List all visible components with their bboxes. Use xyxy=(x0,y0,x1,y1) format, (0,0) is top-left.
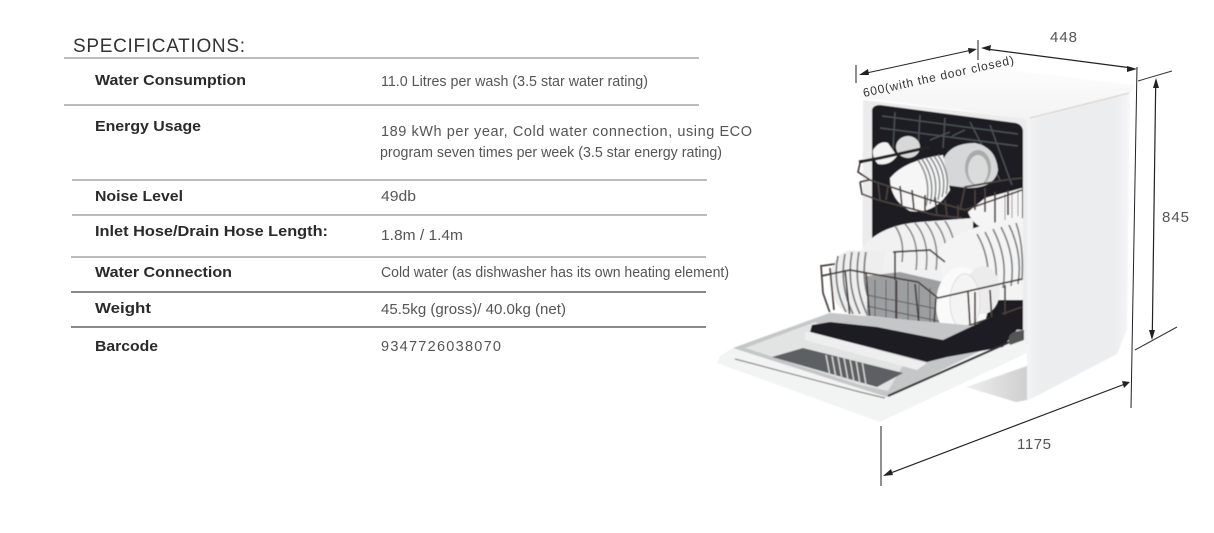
row: barcode: Barcode xyxy=(95,338,158,355)
row: energy usage: Energy Usage xyxy=(95,118,201,135)
door outer panel xyxy=(717,312,1027,422)
silver rack in door xyxy=(826,355,866,385)
open door xyxy=(717,312,1027,422)
upper rack wires xyxy=(858,147,1022,225)
row: noise level: Noise Level xyxy=(95,188,183,205)
dark interior xyxy=(865,105,1023,335)
cutlery basket xyxy=(867,272,943,338)
cabinet front frame xyxy=(862,100,1027,345)
row: noise level: 49db xyxy=(381,189,416,205)
row: hose length: 1.8m / 1.4m xyxy=(381,228,463,244)
front-left plates xyxy=(829,250,885,315)
mug xyxy=(943,143,998,188)
row: energy usage: 189 kWh per year, Cold water connection, using ECO xyxy=(381,124,752,140)
interior back-wall clutter xyxy=(880,112,1018,185)
dimension: 448 depth: 448 xyxy=(1050,29,1077,46)
row: water consumption: 11.0 Litres per wash (3.5 star water rating) xyxy=(381,74,648,90)
row: energy usage xyxy=(95,118,752,161)
row: energy usage: program seven times per week (3.5 star energy rating) xyxy=(380,145,722,161)
back plates xyxy=(862,218,973,290)
plinth xyxy=(966,366,1027,402)
row: water connection: Cold water (as dishwasher has its own heating element) xyxy=(381,265,729,281)
row: water consumption xyxy=(95,72,648,90)
row: barcode: 9347726038070 xyxy=(381,339,501,355)
dimension: 1175 depth with door open: 1175 xyxy=(1017,436,1051,453)
row: hose length: Inlet Hose/Drain Hose Length: xyxy=(95,223,328,240)
row: weight: Weight xyxy=(95,300,151,317)
dishwasher illustration xyxy=(717,66,1135,422)
dimension: 845 height xyxy=(1135,71,1189,350)
row: weight: 45.5kg (gross)/ 40.0kg (net) xyxy=(381,302,566,318)
row: weight xyxy=(95,300,566,318)
upper rack dishes xyxy=(873,136,1022,229)
dimension: 600 width: 600(with the door closed) xyxy=(862,53,1015,100)
front round plates xyxy=(936,267,988,341)
top surface xyxy=(857,66,1135,120)
row: water connection: Water Connection xyxy=(95,264,232,281)
specifications table xyxy=(64,58,752,355)
title: SPECIFICATIONS: xyxy=(73,36,245,57)
dimension: 1175 depth with door open xyxy=(881,67,1137,486)
stacked plates xyxy=(890,155,950,212)
side panel xyxy=(1027,92,1130,401)
cups xyxy=(873,142,897,164)
lower rack wires xyxy=(821,250,1022,338)
door seam lines xyxy=(735,359,885,398)
small bowls xyxy=(968,188,1022,229)
dimension: 448 depth xyxy=(981,29,1137,72)
row: water connection xyxy=(95,264,729,281)
row: hose length xyxy=(95,223,463,244)
detergent strip xyxy=(805,332,927,370)
lower rack dishes xyxy=(829,218,1023,341)
row: water consumption: Water Consumption xyxy=(95,72,246,89)
door inner dark panels xyxy=(810,313,1023,362)
row: noise level xyxy=(95,188,416,205)
door inner tray xyxy=(733,313,1023,397)
dimension: 845 height: 845 xyxy=(1162,209,1189,226)
door hinge xyxy=(1009,330,1024,345)
row: barcode xyxy=(95,338,501,355)
